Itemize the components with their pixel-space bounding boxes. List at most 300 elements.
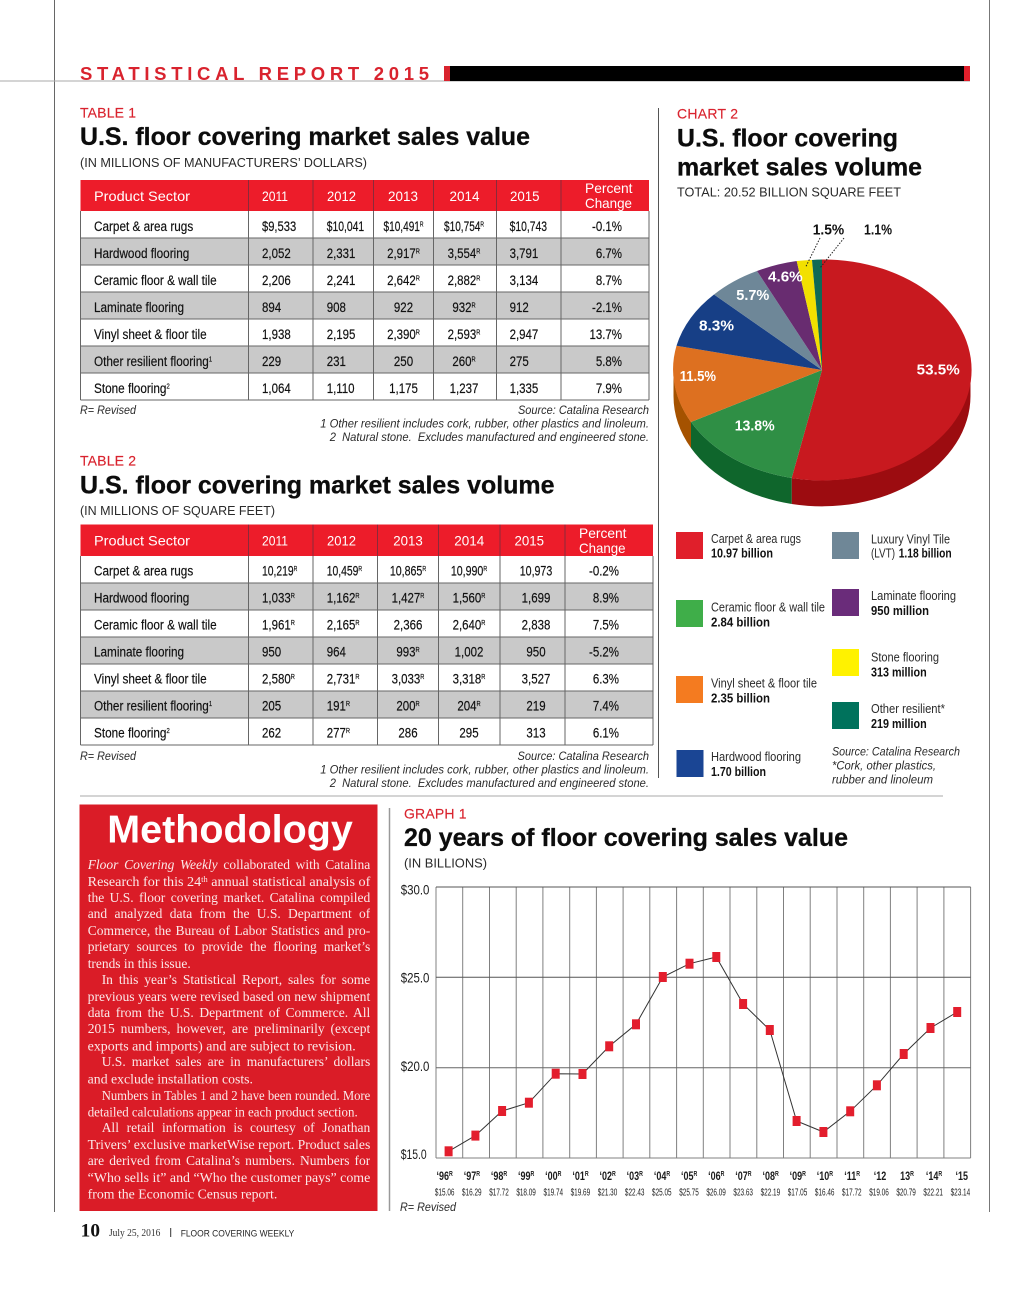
table 1 header row: 2014 (450, 188, 480, 204)
line chart: 20 years of sales value (401, 881, 971, 1198)
x axis value labels: $26.09 (706, 1186, 726, 1198)
row: ceramic: Ceramic floor & wall tile (94, 272, 217, 288)
table 2 header row: Change (579, 540, 626, 556)
table 2 header row: 2012 (327, 532, 356, 548)
methodology body text (88, 857, 371, 1202)
pie percentage labels: 11.5% (680, 368, 716, 385)
x axis value labels: $17.72 (842, 1186, 862, 1198)
row: stone: 313 (526, 724, 546, 741)
x axis year labels: ‘15 (955, 1170, 968, 1183)
table 2 heading block (80, 453, 555, 518)
x axis value labels: $17.72 (489, 1186, 509, 1198)
methodology body text: detailed calculations appear in each product section. (88, 1104, 358, 1119)
row: laminate: 1,002 (455, 643, 483, 660)
pie percentage labels: 5.7% (736, 287, 769, 304)
methodology body text: from the Economic Census report. (88, 1187, 277, 1202)
methodology body text: trends in this issue. (88, 956, 191, 971)
methodology body text: Research for this 24 (88, 874, 196, 889)
row: carpet: R (294, 565, 298, 573)
x axis value labels: $22.19 (761, 1186, 780, 1198)
row: carpet: R (420, 221, 424, 229)
row: laminate: -2.1% (592, 299, 622, 315)
legend: carpet: 10.97 billion (711, 546, 773, 561)
row: vinyl: Vinyl sheet & floor tile (94, 671, 207, 687)
legend: vinyl: Vinyl sheet & floor tile (711, 675, 817, 690)
methodology body text: Floor Covering Weekly collaborated with Catalina (88, 857, 370, 872)
row: other resilient: 229 (262, 353, 281, 369)
row: other resilient: Other resilient flooring (94, 353, 209, 369)
methodology body text: the U.S. floor covering market. Catalina compiled (88, 890, 370, 905)
x axis value labels: $17.05 (788, 1186, 808, 1198)
row: ceramic: 2,165 (327, 616, 355, 633)
table 2 header row: 2015 (514, 532, 544, 548)
row: stone: 286 (398, 724, 418, 741)
x axis year labels: ‘06 (708, 1170, 721, 1183)
x axis year labels: R (938, 1170, 943, 1178)
row: other resilient: 250 (394, 353, 413, 369)
x axis year labels: ‘98 (491, 1170, 503, 1183)
legend: stone (832, 649, 939, 679)
chart grid (436, 887, 971, 1158)
row: stone: 1,175 (389, 380, 418, 396)
table 1: market sales value (80, 180, 649, 400)
x axis year labels: R (476, 1170, 480, 1178)
x axis year labels: ‘01 (572, 1170, 585, 1183)
x axis value labels: $16.46 (815, 1186, 835, 1198)
methodology body text: Commerce, the Bureau of Labor Statistics and pro- (88, 923, 370, 938)
chart 2 title: U.S. floor covering (677, 124, 898, 152)
row: ceramic: 1,961 (262, 616, 291, 633)
legend source note (832, 747, 960, 786)
row: laminate: 932 (452, 299, 472, 315)
pie slices (673, 259, 972, 480)
pie percentage labels (680, 221, 960, 435)
x axis value labels: $19.74 (544, 1186, 563, 1198)
methodology body text: previous years were revised based on new shipment (88, 989, 371, 1004)
row: vinyl: R (420, 674, 425, 681)
x axis year labels: ‘05 (681, 1170, 693, 1183)
x axis year labels: R (503, 1170, 508, 1178)
x axis value labels: $25.05 (652, 1186, 672, 1198)
x axis year labels (437, 1170, 968, 1183)
x axis year labels: R (775, 1170, 779, 1178)
row: other resilient: R (416, 701, 420, 708)
row: hardwood: 1,427 (392, 589, 420, 606)
row: laminate: -5.2% (589, 643, 619, 660)
x axis year labels: R (693, 1170, 698, 1178)
row: ceramic (94, 616, 619, 633)
row: vinyl: R (481, 674, 486, 681)
graph 1 label: GRAPH 1 (404, 805, 467, 821)
panel: methodology (80, 804, 378, 1211)
row: vinyl: 2,947 (510, 326, 538, 342)
row: stone: Stone flooring (94, 725, 166, 741)
x axis year labels: R (910, 1170, 914, 1178)
row: hardwood: R (420, 593, 425, 600)
table 2 header row: 2011 (262, 532, 288, 548)
row: carpet: R (483, 565, 488, 573)
row: vinyl: 2,195 (327, 326, 355, 342)
pie percentage labels: 1.1% (864, 221, 892, 238)
row: hardwood: 1,560 (453, 589, 481, 606)
data line (449, 957, 957, 1151)
x axis year labels: ‘07 (735, 1170, 748, 1183)
legend: carpet: Carpet & area rugs (711, 531, 801, 546)
row: carpet: $10,743 (510, 218, 547, 234)
row: other resilient: 219 (526, 697, 546, 714)
legend: ceramic (676, 600, 825, 630)
x axis year labels: R (558, 1170, 562, 1178)
row: other resilient: 275 (510, 353, 529, 369)
row: stone: 7.9% (596, 380, 622, 396)
legend: hardwood: Hardwood flooring (711, 749, 801, 764)
row: hardwood (94, 589, 619, 606)
methodology body text: data from the U.S. Department of Commerce. All (88, 1005, 370, 1020)
row: ceramic: 2,206 (262, 272, 291, 288)
pie percentage labels: 13.8% (735, 418, 775, 435)
row: laminate: Laminate flooring (94, 644, 184, 660)
x axis year labels: R (748, 1170, 752, 1178)
table 2 footnotes: R= Revised (80, 751, 137, 763)
row: hardwood: R (481, 593, 486, 600)
row: hardwood: 2,052 (262, 245, 291, 261)
table 1 header row: 2015 (510, 188, 540, 204)
row: laminate (94, 299, 622, 315)
chart 2 label: CHART 2 (677, 106, 738, 122)
x axis year labels: R (531, 1170, 535, 1178)
table 2 header row: 2014 (454, 532, 484, 548)
methodology body text: and analyzed data from the U.S. Department of (88, 906, 370, 921)
row: laminate: 894 (262, 299, 281, 315)
row: hardwood: 3,554 (448, 245, 476, 261)
table 2 header row: Percent (579, 525, 627, 541)
row: vinyl: 3,318 (453, 670, 481, 687)
x axis value labels: $21.30 (598, 1186, 618, 1198)
row: laminate: 950 (262, 643, 281, 660)
row: vinyl (94, 326, 622, 342)
row: carpet: R (480, 221, 485, 229)
row: stone: 277 (327, 724, 346, 741)
row: stone: 1,064 (262, 380, 291, 396)
header: statistical report banner (80, 63, 970, 84)
row: carpet: $10,041 (327, 218, 364, 234)
x axis year labels: ‘12 (874, 1170, 886, 1183)
row: carpet (94, 562, 619, 579)
legend: laminate (832, 588, 956, 618)
row: other resilient: 231 (327, 353, 346, 369)
row: hardwood: 2,331 (327, 245, 355, 261)
methodology body text: th (201, 875, 208, 884)
table 1 header row: 2011 (262, 188, 288, 204)
legend: stone: 313 million (871, 664, 927, 679)
table 2: market sales volume (80, 524, 653, 745)
row: laminate: R (416, 647, 420, 654)
methodology heading: Methodology (107, 808, 353, 852)
row: ceramic: Ceramic floor & wall tile (94, 617, 217, 633)
legend: hardwood: 1.70 billion (711, 764, 766, 779)
legend: luxury vinyl tile: Luxury Vinyl Tile (871, 531, 950, 546)
x axis value labels: $18.09 (516, 1186, 536, 1198)
legend: luxury vinyl tile (832, 531, 952, 561)
y axis labels: $30.0 (401, 881, 430, 897)
row: stone: 262 (262, 724, 281, 741)
table 1 header row: Product Sector (94, 188, 190, 204)
row: stone: 1,237 (450, 380, 478, 396)
row: other resilient (94, 697, 619, 714)
pie legend (676, 531, 960, 786)
row: hardwood: 8.9% (593, 589, 619, 606)
row: vinyl: 3,527 (522, 670, 550, 687)
row: carpet: R (422, 565, 427, 573)
row: other resilient (94, 353, 622, 369)
methodology body text: are derived from Catalina’s numbers. Numbers for (88, 1153, 370, 1168)
black banner bar (444, 66, 970, 81)
table 1 footnotes: Source: Catalina Research (518, 405, 649, 417)
methodology body text: Numbers in Tables 1 and 2 have been rounded. More (102, 1088, 370, 1103)
methodology body text: annual statistical analysis of (208, 874, 371, 889)
legend: vinyl: 2.35 billion (711, 690, 770, 705)
row: hardwood: Hardwood flooring (94, 245, 189, 261)
methodology body text: Trivers’ exclusive marketWise report. Product sales (88, 1137, 370, 1152)
chart 2 title (677, 124, 922, 182)
footer: folio (81, 1221, 294, 1242)
row: stone: 2 (166, 383, 170, 391)
row: hardwood: 1,162 (327, 589, 355, 606)
row: ceramic: R (476, 275, 481, 283)
row: other resilient: R (346, 701, 350, 708)
x axis value labels: $15.06 (435, 1186, 455, 1198)
x axis year labels: ‘08 (762, 1170, 775, 1183)
chart 2 subtitle: TOTAL: 20.52 BILLION SQUARE FEET (677, 185, 901, 200)
row: carpet: -0.2% (589, 562, 619, 579)
row: carpet: Carpet & area rugs (94, 218, 193, 234)
legend: luxury vinyl tile: 1.18 billion (899, 546, 952, 561)
row: carpet: 10,973 (520, 563, 552, 579)
row: carpet: $9,533 (262, 219, 296, 234)
legend: luxury vinyl tile: (LVT) (871, 546, 895, 561)
row: vinyl: R (291, 674, 295, 681)
x axis year labels: R (612, 1170, 616, 1178)
legend: laminate: Laminate flooring (871, 588, 956, 603)
pie percentage labels: 53.5% (917, 362, 960, 379)
methodology body text: prietary sources to provide the flooring market’s (88, 939, 370, 954)
x axis year labels: R (721, 1170, 725, 1178)
row: laminate: 922 (394, 299, 413, 315)
row: vinyl: 2,593 (448, 326, 476, 342)
row: laminate: 912 (510, 299, 529, 315)
row: stone: Stone flooring (94, 380, 166, 396)
row: other resilient: 200 (396, 697, 416, 714)
row: carpet: 10,219 (262, 563, 294, 579)
x axis year labels: R (666, 1170, 671, 1178)
row: laminate: Laminate flooring (94, 299, 184, 315)
legend: other resilient: 219 million (871, 716, 927, 731)
report title: STATISTICAL REPORT 2015 (80, 63, 429, 84)
row: laminate: 908 (327, 299, 346, 315)
row: other resilient: 205 (262, 697, 281, 714)
x axis value labels (435, 1186, 970, 1198)
chart 2 heading block (677, 106, 922, 200)
table 2 label: TABLE 2 (80, 453, 136, 469)
legend: laminate: 950 million (871, 603, 929, 618)
row: carpet: Carpet & area rugs (94, 563, 193, 579)
row: ceramic: 2,241 (327, 272, 355, 288)
row: ceramic: 3,134 (510, 272, 538, 288)
graph 1 subtitle: (IN BILLIONS) (404, 856, 487, 871)
x axis year labels: R (639, 1170, 643, 1178)
row: hardwood: 1,699 (522, 589, 550, 606)
row: ceramic: 8.7% (596, 272, 622, 288)
row: hardwood: 6.7% (596, 245, 622, 261)
methodology body text: exports and imports) and are subject to revision. (88, 1038, 356, 1053)
x axis year labels: R (449, 1170, 453, 1178)
legend source note: Source: Catalina Research (832, 747, 960, 759)
x axis value labels: $19.06 (869, 1186, 889, 1198)
row: ceramic (94, 272, 622, 288)
x axis value labels: $23.14 (951, 1186, 970, 1198)
row: ceramic: 2,882 (448, 272, 476, 288)
x axis value labels: $19.69 (571, 1186, 590, 1198)
row: ceramic: R (291, 620, 295, 627)
row: carpet: -0.1% (592, 218, 622, 234)
row: stone (94, 380, 622, 396)
x axis year labels: ‘10 (817, 1170, 829, 1183)
table 2 header row (80, 524, 653, 556)
legend: ceramic: Ceramic floor & wall tile (711, 600, 825, 615)
table 1 label: TABLE 1 (80, 104, 136, 120)
methodology body text: “Who sells it” and “Who the customer pays” come (88, 1170, 370, 1185)
table 1 heading block (80, 104, 530, 170)
row: vinyl: 3,033 (392, 670, 420, 687)
row: carpet: R (358, 565, 363, 573)
table 2 footnotes: Source: Catalina Research (518, 751, 649, 763)
row: hardwood (94, 245, 622, 261)
pie chart: sales volume share (673, 221, 972, 506)
table 1 footnotes: 1 Other resilient includes cork, rubber, other plastics and linoleum. (320, 419, 649, 431)
row: ceramic: 7.5% (593, 616, 619, 633)
table 1 footnotes: R= Revised (80, 405, 137, 417)
y axis labels: $20.0 (401, 1058, 430, 1074)
x axis value labels: $16.29 (462, 1186, 482, 1198)
row: vinyl: Vinyl sheet & floor tile (94, 326, 207, 342)
table 1 footnotes: 2 Natural stone. Excludes manufactured and engineered stone. (329, 432, 649, 444)
row: stone: R (346, 728, 350, 735)
graph 1 heading block (404, 805, 848, 871)
publication name: FLOOR COVERING WEEKLY (181, 1229, 294, 1239)
x axis year labels: ‘00 (545, 1170, 558, 1183)
x axis year labels: ‘99 (518, 1170, 531, 1183)
table 1 header row: 2013 (388, 188, 418, 204)
row: hardwood: R (291, 593, 295, 600)
row: vinyl: R (416, 329, 420, 337)
row: other resilient: 1 (209, 701, 212, 708)
row: laminate: 950 (526, 643, 546, 660)
row: other resilient: Other resilient flooring (94, 698, 209, 714)
table 2 header row: 2013 (393, 532, 423, 548)
row: ceramic: 2,642 (387, 272, 416, 288)
methodology body text: and exclude installation costs. (88, 1071, 253, 1086)
graph 1 revised note: R= Revised (400, 1202, 457, 1214)
row: hardwood: R (416, 248, 420, 256)
x axis year labels: ‘04 (654, 1170, 666, 1183)
row: ceramic: R (416, 275, 420, 283)
row: other resilient: R (472, 356, 476, 364)
row: carpet: $10,491 (383, 218, 420, 234)
table 1 header row: Percent (585, 180, 633, 196)
x axis year labels: ‘09 (790, 1170, 802, 1183)
row: laminate: R (472, 302, 476, 310)
legend source note: rubber and linoleum (832, 774, 933, 786)
legend: vinyl (676, 675, 817, 705)
row: stone: 2 (166, 728, 170, 735)
row: hardwood: R (476, 248, 481, 256)
x axis value labels: $22.43 (625, 1186, 645, 1198)
row: stone: 295 (459, 724, 479, 741)
row: other resilient: 7.4% (593, 697, 619, 714)
row: carpet: 10,459 (327, 563, 358, 579)
x axis year labels: ‘14 (926, 1170, 938, 1183)
page number: 10 (81, 1221, 100, 1242)
table 1 header row: Change (585, 195, 632, 211)
row: vinyl: 2,580 (262, 670, 291, 687)
row: laminate: 964 (327, 643, 346, 660)
row: other resilient: R (477, 701, 481, 708)
table 2 header row: Product Sector (94, 532, 190, 548)
row: stone: 6.1% (593, 724, 619, 741)
row: hardwood: 3,791 (510, 245, 538, 261)
legend: other resilient: Other resilient* (871, 701, 945, 716)
row: stone (94, 724, 619, 741)
graph 1 title: 20 years of floor covering sales value (404, 824, 848, 852)
legend: hardwood (676, 749, 801, 779)
table 1 subtitle: (IN MILLIONS OF MANUFACTURERS’ DOLLARS) (80, 155, 367, 170)
row: hardwood: 2,917 (387, 245, 416, 261)
x axis value labels: $25.75 (679, 1186, 699, 1198)
row: carpet: 10,865 (390, 563, 422, 579)
x axis year labels: R (829, 1170, 833, 1178)
row: carpet (94, 218, 622, 234)
chart 2 title: market sales volume (677, 154, 922, 182)
row: stone: 1,110 (327, 380, 355, 396)
x axis year labels: R (856, 1170, 860, 1178)
row: other resilient: 260 (452, 353, 472, 369)
methodology body text: U.S. market sales are in manufacturers’ dollars (102, 1054, 370, 1069)
row: other resilient: 1 (209, 356, 212, 364)
methodology body text: All retail information is courtesy of Jonathan (102, 1120, 370, 1135)
table 2 subtitle: (IN MILLIONS OF SQUARE FEET) (80, 503, 275, 518)
pie percentage labels: 4.6% (768, 269, 803, 286)
row: carpet: $10,754 (444, 218, 480, 234)
row: other resilient: 5.8% (596, 353, 622, 369)
row: vinyl: 2,731 (327, 670, 355, 687)
legend: carpet (676, 531, 801, 561)
row: ceramic: R (355, 620, 360, 627)
pie percentage labels: 1.5% (813, 221, 844, 238)
methodology body text: 2015 numbers, however, are preliminarily (except (88, 1021, 370, 1036)
row: ceramic: 2,640 (453, 616, 481, 633)
x axis value labels: $20.79 (896, 1186, 916, 1198)
row: vinyl: 6.3% (593, 670, 619, 687)
x axis value labels: $23.63 (733, 1186, 753, 1198)
pie side walls (674, 370, 970, 506)
issue date: July 25, 2016 (109, 1228, 160, 1239)
table 1 title: U.S. floor covering market sales value (80, 123, 530, 151)
x axis value labels: $22.21 (923, 1186, 943, 1198)
y axis labels (401, 881, 430, 1162)
legend: stone: Stone flooring (871, 649, 939, 664)
table 2 title: U.S. floor covering market sales volume (80, 472, 555, 500)
row: ceramic: 2,366 (394, 616, 422, 633)
